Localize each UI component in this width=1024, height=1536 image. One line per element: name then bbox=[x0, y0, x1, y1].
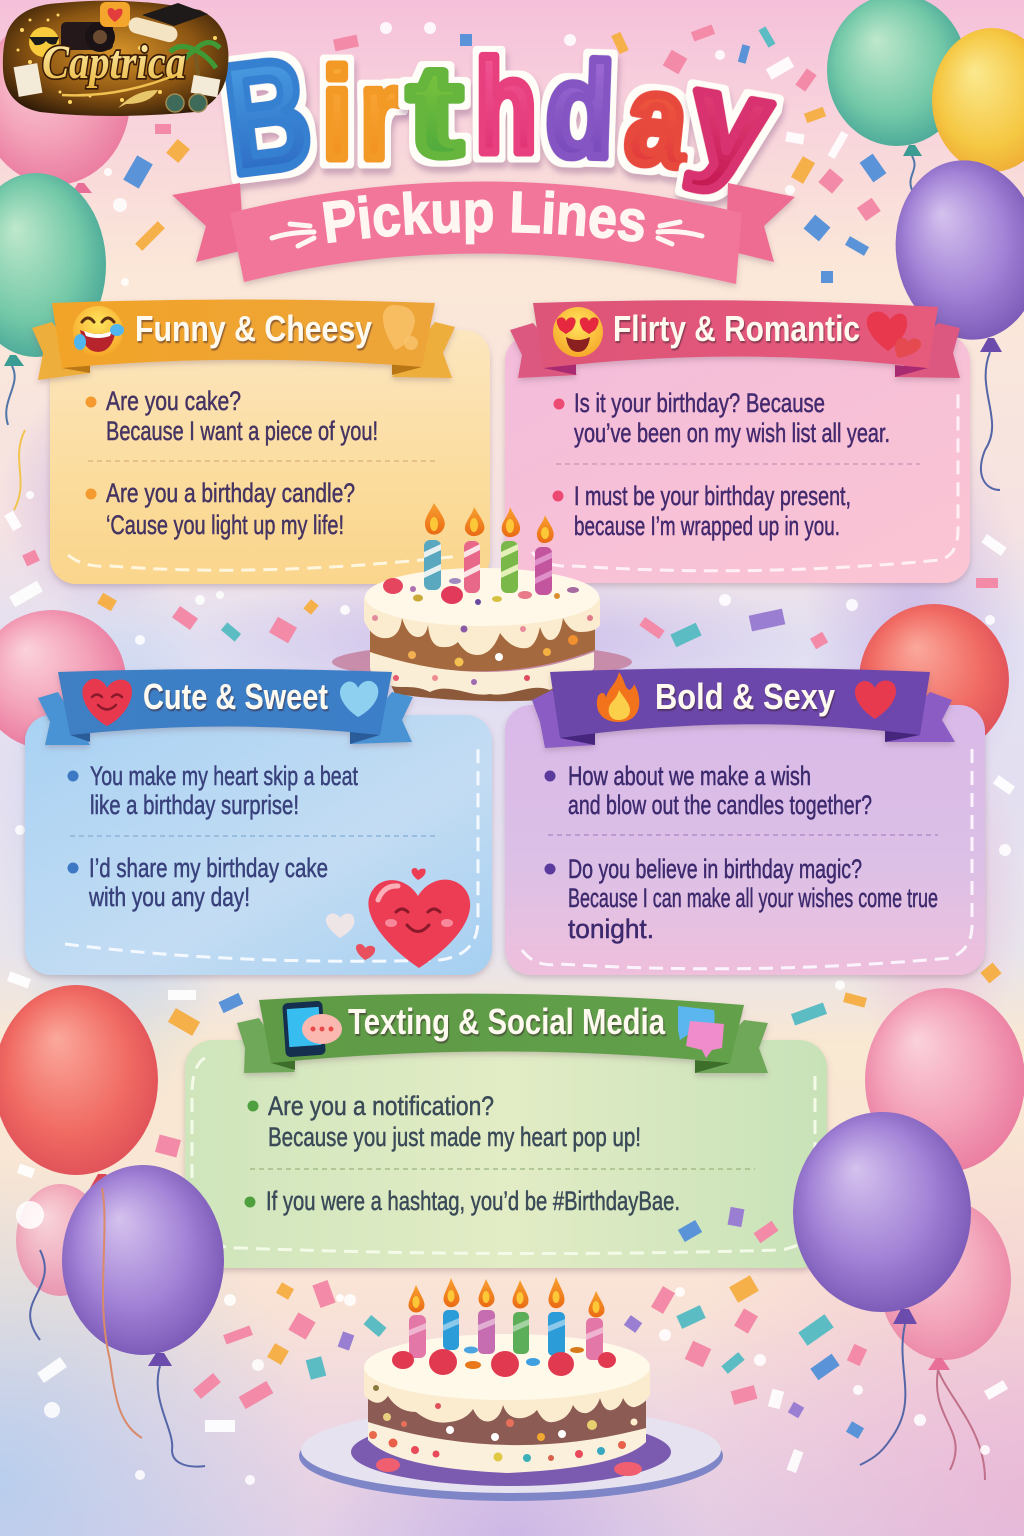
panel: Bold & Sexy bbox=[505, 668, 985, 975]
ribbon bbox=[237, 994, 768, 1073]
letter h: h bbox=[475, 33, 537, 180]
icing bbox=[364, 597, 600, 655]
cherries bbox=[383, 578, 403, 594]
plate bbox=[299, 1411, 723, 1501]
icon: big smiling heart bbox=[326, 868, 470, 968]
filling bbox=[370, 652, 594, 695]
letter y: y bbox=[679, 42, 782, 200]
icon: diploma and cap bbox=[127, 3, 208, 44]
flourish left bbox=[272, 224, 314, 246]
ribbon bbox=[38, 669, 413, 745]
icon: palm bbox=[170, 42, 220, 88]
pickup line 2: I’d share my birthday cake bbox=[89, 853, 328, 883]
ribbon bbox=[510, 300, 960, 378]
letter t: t bbox=[408, 40, 462, 183]
heading: Bold & Sexy bbox=[655, 676, 835, 717]
icon: hearts bbox=[867, 312, 921, 358]
pickup line 2 bbox=[552, 481, 851, 541]
pickup line 2 bbox=[68, 853, 328, 912]
pickup line 2: tonight. bbox=[568, 914, 654, 944]
sponge bbox=[370, 612, 595, 671]
pickup line 2: Do you believe in birthday magic? bbox=[568, 854, 862, 884]
pickup line 1: Are you cake? bbox=[106, 386, 241, 416]
icon: camera bbox=[61, 22, 115, 52]
pickup line 2 bbox=[86, 478, 355, 540]
panel: Funny & Cheesy bbox=[32, 300, 490, 584]
flames bbox=[425, 503, 554, 543]
pickup line 1: Because I want a piece of you! bbox=[106, 416, 378, 446]
card bbox=[505, 335, 970, 583]
ribbon bbox=[32, 300, 455, 380]
letter r: r bbox=[360, 43, 400, 186]
heading: Texting & Social Media bbox=[348, 1001, 666, 1042]
balloon: lower right purple bbox=[793, 1112, 971, 1465]
pickup line 2: Are you a birthday candle? bbox=[106, 478, 355, 508]
pickup line 1: Because you just made my heart pop up! bbox=[268, 1122, 641, 1152]
icon: blue heart bbox=[340, 681, 378, 717]
swoosh bbox=[62, 74, 178, 95]
candles bbox=[409, 1310, 603, 1360]
candles bbox=[424, 540, 552, 595]
flames bbox=[409, 1277, 605, 1318]
cake: bottom bbox=[299, 1277, 723, 1501]
plate decorations bbox=[376, 1458, 400, 1472]
cake: centre bbox=[332, 503, 632, 701]
icon: sunglasses emoji bbox=[29, 27, 59, 57]
balloons: middle bbox=[0, 604, 1009, 756]
sunglasses bbox=[166, 94, 207, 112]
filling bbox=[368, 1422, 646, 1473]
sprinkles bbox=[372, 578, 593, 685]
panel: Texting & Social Media bbox=[185, 994, 827, 1268]
pickup line 1: Are you a notification? bbox=[268, 1091, 494, 1121]
card bbox=[25, 715, 492, 975]
heading: Funny & Cheesy bbox=[135, 308, 372, 349]
pickup line 2: ‘Cause you light up my life! bbox=[106, 510, 344, 540]
pickup line 2: because I’m wrapped up in you. bbox=[574, 511, 840, 541]
sprinkles bbox=[369, 1346, 638, 1462]
heading: Cute & Sweet bbox=[143, 676, 328, 717]
pickup line 1: How about we make a wish bbox=[568, 761, 811, 791]
cherries bbox=[392, 1349, 616, 1377]
heading: Flirty & Romantic bbox=[613, 308, 860, 349]
confetti on green panel bbox=[678, 1207, 778, 1243]
flourish right bbox=[658, 222, 702, 244]
icon: chat bubbles bbox=[678, 1006, 724, 1058]
pickup line 2 bbox=[544, 854, 938, 944]
pickup line 1: and blow out the candles together? bbox=[568, 790, 872, 820]
pickup line 1: like a birthday surprise! bbox=[90, 790, 299, 820]
letter d: d bbox=[543, 35, 617, 186]
balloons: upper right bbox=[827, 0, 1024, 490]
photos bbox=[14, 63, 220, 97]
subtitle: Pickup Lines bbox=[322, 190, 645, 244]
icon: phone bbox=[282, 1001, 342, 1057]
pickup line 2: with you any day! bbox=[88, 882, 250, 912]
feather bbox=[118, 90, 158, 108]
pickup line 1 bbox=[544, 761, 872, 820]
icon: flame bbox=[597, 672, 639, 722]
pickup line 1: Is it your birthday? Because bbox=[574, 388, 825, 418]
letter a: a bbox=[620, 46, 695, 195]
balloons: lower left bbox=[0, 985, 224, 1467]
logo wordmark: Captrica bbox=[42, 36, 186, 89]
pickup line 2: If you were a hashtag, you’d be #BirthdayBae. bbox=[266, 1186, 680, 1216]
ribbon: Pickup Lines bbox=[172, 182, 795, 288]
pickup line 1: You make my heart skip a beat bbox=[90, 761, 358, 791]
card bbox=[185, 1040, 827, 1268]
icon: speech heart bbox=[100, 2, 130, 27]
icon: heart eyes emoji bbox=[553, 307, 603, 357]
logo: Captrica bbox=[3, 1, 228, 116]
title: Birthday bbox=[215, 25, 782, 208]
card bbox=[505, 705, 985, 975]
letter i: i bbox=[322, 43, 352, 186]
pickup line 1 bbox=[554, 388, 890, 448]
sponge bbox=[368, 1390, 646, 1454]
sparkles bbox=[16, 14, 217, 104]
pickup line 2: I must be your birthday present, bbox=[574, 481, 851, 511]
panel: Flirty & Romantic bbox=[505, 300, 970, 583]
pickup line 1 bbox=[248, 1091, 641, 1152]
card bbox=[50, 330, 490, 584]
pickup line 1 bbox=[68, 761, 358, 820]
balloons: upper part of lower right and left bbox=[16, 988, 1024, 1480]
panel: Cute & Sweet bbox=[25, 669, 492, 975]
logo backdrop bbox=[3, 1, 228, 116]
icon: smiling heart bbox=[82, 679, 132, 726]
balloons: upper left bbox=[0, 15, 130, 510]
pickup line 1: you’ve been on my wish list all year. bbox=[574, 418, 890, 448]
plate bbox=[332, 644, 632, 680]
icon: laughing emoji bbox=[73, 306, 124, 356]
letter B: B bbox=[215, 25, 320, 208]
pickup line 1 bbox=[86, 386, 378, 446]
icing bbox=[364, 1367, 650, 1423]
icon: red heart bbox=[855, 681, 896, 719]
ribbon bbox=[532, 668, 955, 748]
